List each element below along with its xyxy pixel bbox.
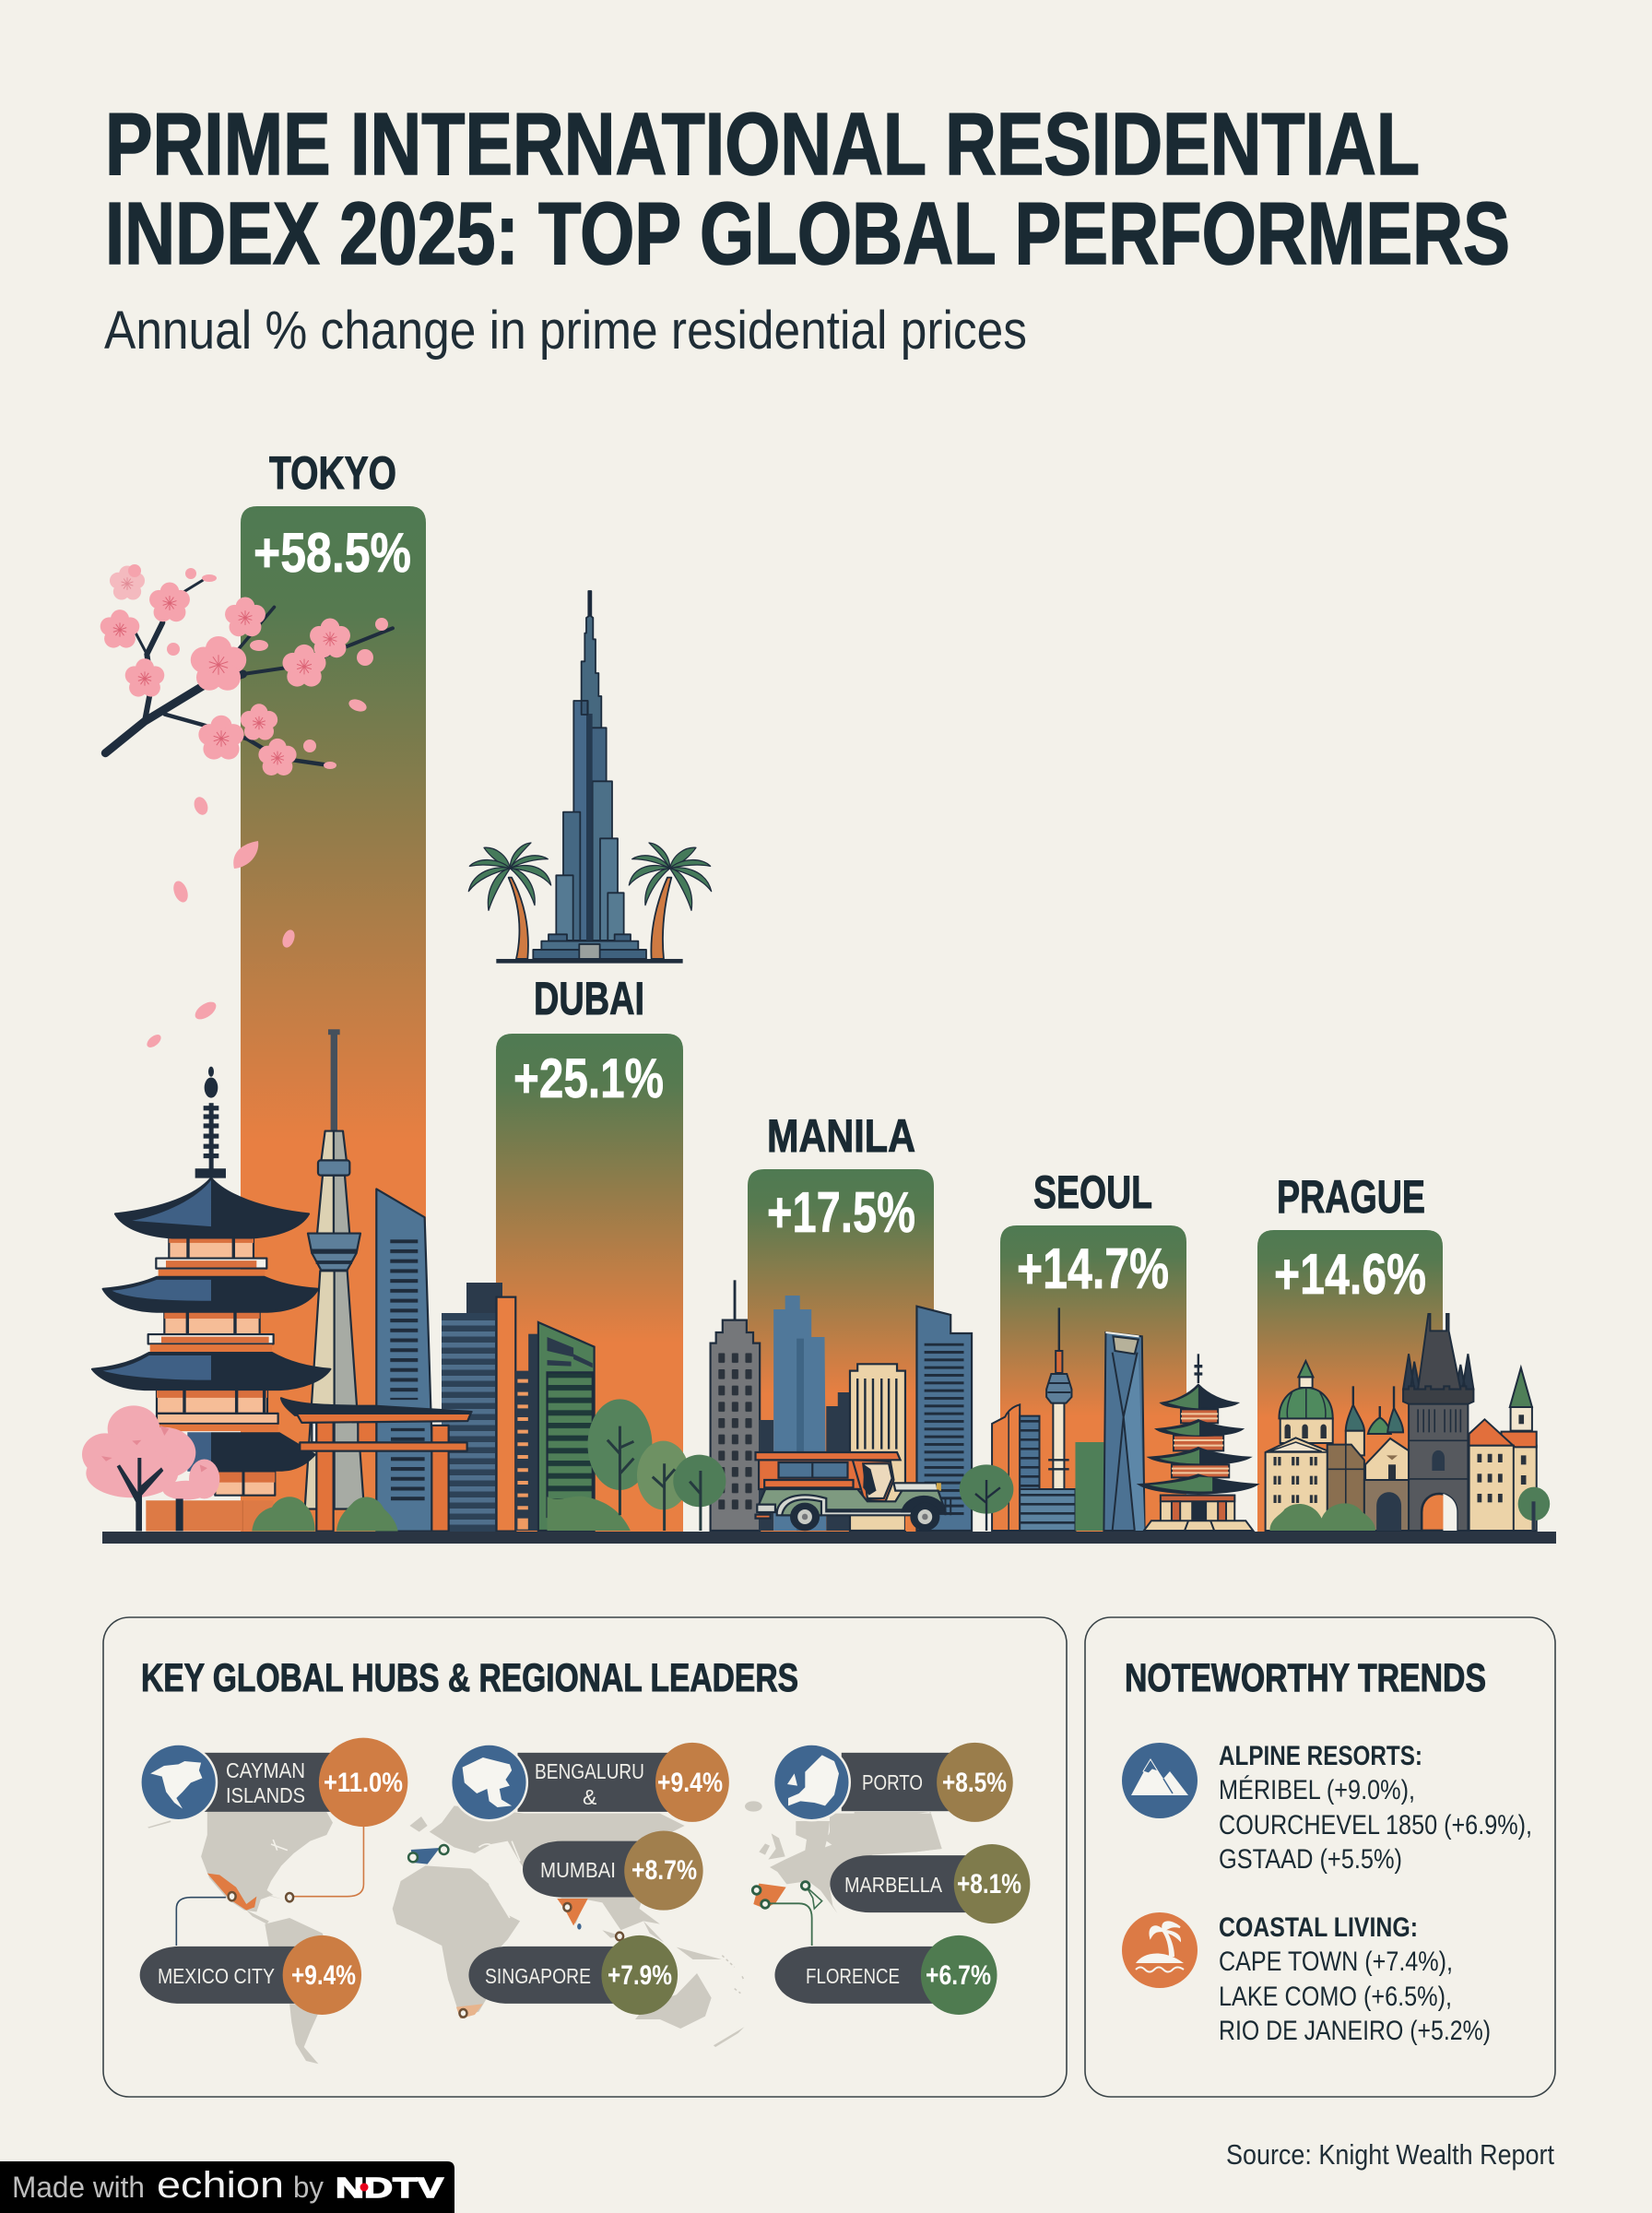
pill labels and values: MEXICO CITY (158, 1964, 275, 1988)
illustration: Dubai skyline buildings (442, 1283, 631, 1533)
illustration: Manila skyline (587, 1280, 972, 1531)
icon: Burj tower (496, 591, 683, 964)
text: coastal living: LAKE COMO (+6.5%), (1219, 1982, 1452, 2012)
panel: key global hubs (103, 1617, 1067, 2097)
Tokyo pagoda (92, 1067, 330, 1532)
source note: Source: Knight Wealth Report (1226, 2138, 1554, 2171)
tower block with windows (711, 1280, 760, 1531)
pill labels and values (158, 1758, 1021, 1991)
roofs (92, 1178, 330, 1472)
bar: Prague (1257, 1171, 1443, 1533)
bar: Seoul: +14.7% (1017, 1237, 1169, 1301)
map pins (229, 1845, 623, 2018)
bar: Dubai (496, 973, 683, 1533)
badge: made with echion by NDTV: NDTV (336, 2172, 443, 2204)
text: coastal living: RIO DE JANEIRO (+5.2%) (1219, 2016, 1491, 2046)
illustration: Tokyo skyline (82, 1029, 472, 1532)
bar: Tokyo: +58.5% (254, 522, 411, 584)
heading: KEY GLOBAL HUBS & REGIONAL LEADERS (141, 1656, 798, 1700)
illustration: Dubai Burj tower and palms (468, 591, 712, 964)
pill labels and values: +6.7% (926, 1960, 991, 1991)
pill labels and values: ISLANDS (226, 1783, 305, 1807)
pill labels and values: MARBELLA (844, 1873, 943, 1897)
badge: made with echion by NDTV (0, 2161, 454, 2213)
icon: mountains (1122, 1743, 1198, 1818)
globe continent: Europe (787, 1755, 839, 1805)
Seoul pagoda (1139, 1354, 1257, 1531)
bar: Manila: MANILA (767, 1110, 915, 1162)
Europe map (722, 1801, 942, 1994)
icon: torii gate (281, 1398, 472, 1532)
text: coastal living (1219, 1912, 1491, 2046)
pill labels and values: FLORENCE (806, 1964, 900, 1988)
icon: palm island (1122, 1912, 1198, 1988)
bar: Manila: +17.5% (767, 1181, 915, 1245)
Tokyo skytree (305, 1029, 364, 1509)
globe icons (140, 1745, 850, 1820)
cherry branch (105, 580, 393, 765)
text: alpine resorts: ALPINE RESORTS: (1219, 1741, 1422, 1771)
bar: Dubai: DUBAI (534, 973, 644, 1024)
globe continents: North America and Asia (150, 1757, 512, 1809)
pill labels and values: +8.5% (942, 1768, 1007, 1798)
pills: dark labels (140, 1753, 987, 2004)
ground line (102, 1532, 1556, 1544)
pill labels and values: SINGAPORE (485, 1964, 591, 1988)
heading: NOTEWORTHY TRENDS (1125, 1656, 1486, 1700)
title (105, 95, 1510, 283)
text: coastal living: COASTAL LIVING: (1219, 1912, 1418, 1943)
icon: bushes (252, 1497, 398, 1532)
bar: Seoul: SEOUL (1033, 1166, 1152, 1218)
subtitle: Annual % change in prime residential prices (104, 301, 1027, 361)
illustration: Seoul and Prague skylines (960, 1308, 1550, 1531)
text: alpine resorts: GSTAAD (+5.5%) (1219, 1844, 1402, 1875)
bar: Tokyo: TOKYO (269, 447, 396, 499)
bar: Tokyo (241, 447, 426, 1533)
bar: Manila (748, 1110, 934, 1533)
pills and value circles (140, 1738, 1030, 2015)
floors (148, 1236, 278, 1496)
pill labels and values: BENGALURU (535, 1759, 644, 1783)
panel: noteworthy trends (1085, 1617, 1555, 2097)
pill labels and values: +7.9% (608, 1960, 672, 1991)
bar: Seoul (1000, 1166, 1186, 1533)
badge: made with echion by NDTV: echion (157, 2165, 284, 2206)
text: alpine resorts (1219, 1741, 1532, 1875)
badge: made with echion by NDTV: Made with (12, 2171, 145, 2204)
icon: cherry tree (82, 1405, 219, 1532)
icon: palm trees (468, 843, 712, 959)
Tokyo tower (376, 1189, 435, 1532)
connectors (176, 1826, 363, 1946)
badge: made with echion by NDTV: by (293, 2171, 324, 2204)
value circles (283, 1738, 1030, 2015)
pill labels and values: & (583, 1785, 596, 1809)
icon: jeepney (756, 1452, 950, 1531)
text: alpine resorts: COURCHEVEL 1850 (+6.9%), (1219, 1810, 1532, 1840)
skyline: Prague (1266, 1314, 1550, 1531)
pill labels and values: +8.7% (631, 1855, 697, 1886)
world map (148, 1805, 744, 2064)
blue and beige towers (759, 1296, 972, 1531)
skyline: Seoul (960, 1308, 1145, 1531)
pill labels and values: +9.4% (291, 1960, 356, 1991)
pill labels and values: +8.1% (957, 1869, 1021, 1899)
bar: Prague: PRAGUE (1277, 1171, 1425, 1223)
blossoms on cherry branch (100, 564, 388, 775)
text: alpine resorts: MÉRIBEL (+9.0%), (1219, 1775, 1415, 1805)
bar: Dubai: +25.1% (513, 1047, 664, 1109)
bar: Prague: +14.6% (1274, 1243, 1426, 1307)
falling petals (145, 795, 297, 1050)
pill labels and values: MUMBAI (540, 1858, 616, 1882)
icon: trees (587, 1399, 726, 1531)
text: coastal living: CAPE TOWN (+7.4%), (1219, 1947, 1453, 1977)
pill labels and values: PORTO (862, 1770, 923, 1794)
pill labels and values: CAYMAN (226, 1758, 305, 1782)
pill labels and values: +9.4% (657, 1768, 723, 1798)
pill labels and values: +11.0% (324, 1768, 403, 1798)
